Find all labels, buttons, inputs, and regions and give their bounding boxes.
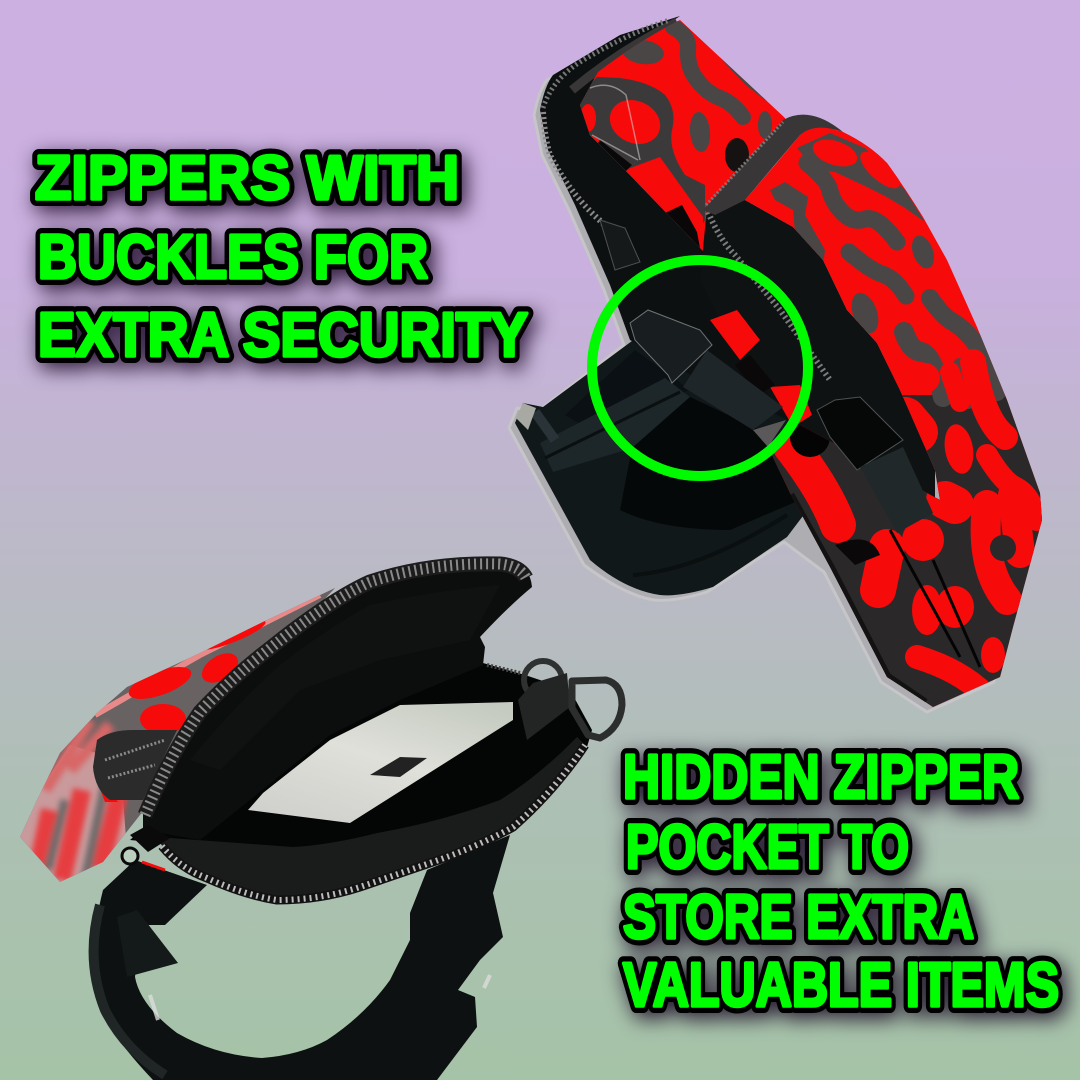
heading: zippers with buckles — [35, 144, 528, 370]
heading: hidden zipper pocket — [623, 743, 1059, 1020]
front pocket red shell — [745, 128, 1042, 707]
rear pocket red shell — [580, 20, 786, 251]
black inner area — [620, 397, 800, 530]
zipper puller — [122, 825, 170, 870]
zipper puller top — [600, 220, 640, 270]
heading: hidden zipper pocket: STORE EXTRA — [623, 883, 974, 952]
heading: zippers with buckles: EXTRA SECURITY — [38, 301, 528, 370]
pocket body — [130, 663, 592, 903]
strap end clip — [516, 403, 536, 430]
lid zipper teeth — [145, 564, 526, 815]
front pocket zipper band — [700, 200, 935, 533]
grey cut-out outline — [509, 21, 1036, 712]
rear zipper fuzz rim — [572, 22, 677, 90]
armband strap — [515, 335, 815, 595]
arm strap loop — [94, 835, 510, 1080]
card logo — [370, 757, 427, 777]
heading: zippers with buckles: EXTRA SECURITY — [38, 301, 528, 370]
inner rear zip — [487, 665, 520, 673]
buckle right — [817, 397, 903, 470]
strap inner opening — [565, 350, 690, 430]
strap lower seam — [633, 515, 787, 575]
strap highlight specks — [150, 975, 490, 1020]
front zipper fuzz rim — [703, 115, 843, 215]
webbing left — [683, 350, 783, 430]
silver card in hidden pocket — [248, 702, 513, 823]
rear pocket zipper band — [540, 16, 810, 430]
product photo: open armband bag — [15, 558, 622, 1080]
heading: hidden zipper pocket: STORE EXTRA — [623, 883, 974, 952]
lower red blobs — [892, 372, 925, 378]
front zipper teeth — [708, 212, 830, 380]
mesh edge — [790, 495, 925, 703]
red outer shell — [15, 585, 345, 890]
red strap band in circle — [710, 310, 760, 360]
heading: zippers with buckles: ZIPPERS WITH — [35, 144, 459, 213]
heading: hidden zipper pocket: POCKET TO — [626, 813, 909, 882]
strap buckle — [117, 910, 178, 977]
webbing tab — [518, 673, 570, 740]
heading: zippers with buckles: BUCKLES FOR — [38, 223, 428, 292]
round ring — [524, 661, 562, 699]
D ring — [572, 680, 622, 738]
lid — [143, 558, 532, 840]
knit rim — [160, 737, 587, 903]
dark lower shell base — [772, 395, 1042, 707]
heading: zippers with buckles: ZIPPERS WITH — [35, 144, 459, 213]
heading: zippers with buckles: BUCKLES FOR — [38, 223, 428, 292]
grey patch — [753, 420, 786, 447]
strap folded edge — [540, 378, 690, 472]
rear zipper teeth — [543, 20, 670, 108]
buckle left — [630, 310, 712, 383]
shell seams — [888, 529, 982, 668]
webbing right — [860, 447, 933, 533]
heading: hidden zipper pocket: POCKET TO — [626, 813, 909, 882]
side zipper pocket — [93, 730, 177, 800]
lid mesh — [190, 585, 500, 770]
front zipper teeth — [162, 745, 585, 900]
green highlight circle — [592, 260, 808, 476]
product photo: closed armband bag — [509, 15, 1060, 720]
